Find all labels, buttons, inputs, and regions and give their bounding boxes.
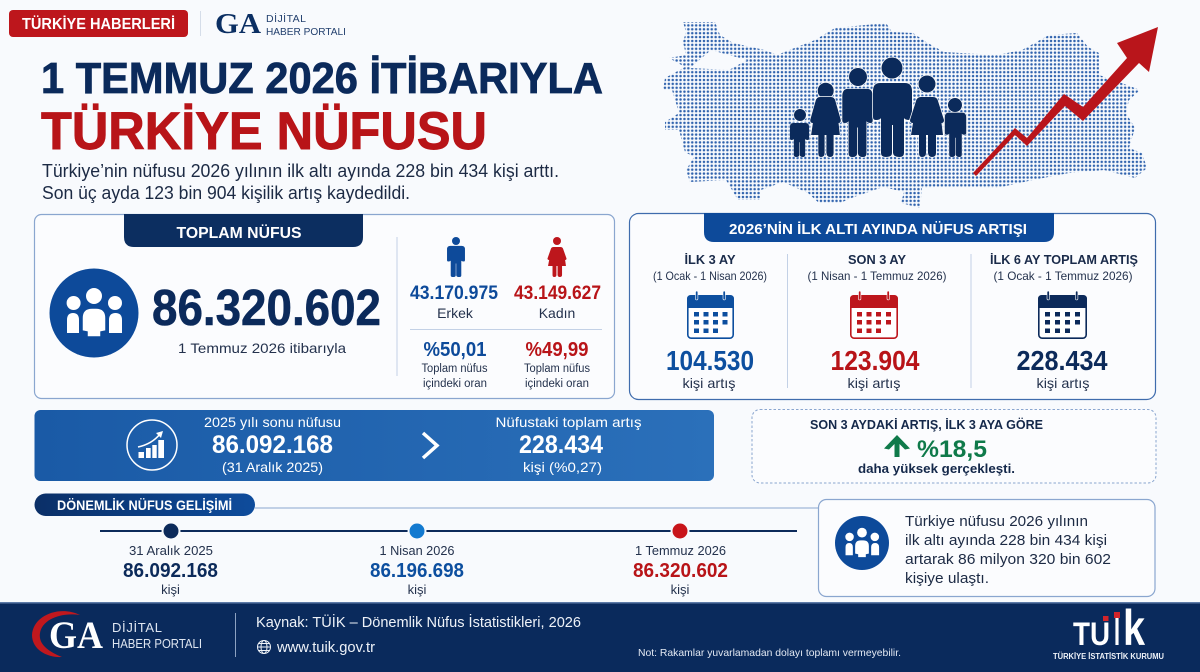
column: first 3 months: 104.530: [666, 345, 754, 376]
footer logo: TÜİK: k: [1123, 600, 1145, 656]
column: first 3 months: kişi artış: [682, 375, 736, 391]
heading: Toplam Nüfus: [124, 214, 363, 247]
heading: periodic population development: DÖNEMLİK NÜFUS GELİŞİMİ: [57, 497, 232, 513]
title: TÜRKİYE NÜFUSU: [41, 102, 487, 161]
year-end figure: 86.092.168: [212, 431, 333, 459]
icon: female figure: [547, 237, 567, 277]
summary text: ilk altı ayında 228 bin 434 kişi: [905, 532, 1107, 549]
subtitle text: Son üç ayda 123 bin 904 kişilik artış kaydedildi.: [42, 183, 410, 203]
male statistics: Toplam nüfus: [422, 363, 488, 375]
total increase figure: [496, 414, 642, 475]
heading: periodic population development: [34, 494, 818, 516]
milestone: 1 Nisan 2026: kişi: [408, 582, 426, 597]
milestone: 1 Nisan 2026: 86.196.698: [370, 560, 464, 582]
total increase figure: 228.434: [519, 431, 603, 459]
female statistics: %49,99: [526, 339, 588, 361]
footer logo: GA: GA: [49, 614, 103, 657]
summary text: artarak 86 milyon 320 bin 602: [905, 551, 1111, 568]
footer logo: GA: DİJİTAL: [112, 620, 162, 635]
year-end figure: 2025 yılı sonu nüfusu: [204, 414, 341, 430]
female statistics: 43.149.627: [514, 283, 601, 304]
website link with globe icon: www.tuik.gov.tr: [276, 639, 375, 656]
column: last 3 months: (1 Nisan - 1 Temmuz 2026): [808, 269, 946, 283]
milestone: 31 Aralık 2025: [123, 522, 218, 597]
column: six month total: [990, 252, 1138, 391]
column: first 3 months: [653, 252, 767, 391]
column: six month total: 228.434: [1016, 345, 1108, 376]
arrow: rising red trend: [973, 27, 1158, 176]
subtitle text: Türkiye’nin nüfusu 2026 yılının ilk altı ayında 228 bin 434 kişi arttı.: [42, 161, 559, 181]
footer logo: TÜİK: TÜ: [1073, 616, 1110, 652]
icon: blue calendar: [687, 291, 734, 338]
footnote: Not: Rakamlar yuvarlamadan dolayı toplamı vermeyebilir.: [638, 647, 901, 659]
milestone: 1 Temmuz 2026: 1 Temmuz 2026: [635, 543, 726, 558]
column: last 3 months: SON 3 AY: [848, 252, 906, 267]
male statistics: 43.170.975: [410, 283, 498, 304]
panel: year-end population band: [34, 410, 714, 481]
footer logo: GA: HABER PORTALI: [112, 636, 202, 651]
title: [41, 54, 603, 161]
footer logo: TÜİK: [1053, 600, 1164, 661]
milestone: 1 Nisan 2026: [370, 522, 464, 597]
icon: red calendar: [850, 291, 898, 338]
male statistics: Erkek: [437, 305, 474, 321]
callout: quarter comparison: %18,5: [917, 436, 987, 463]
total population figure: [152, 279, 381, 356]
callout: quarter comparison: SON 3 AYDAKİ ARTIŞ, İLK 3 AYA GÖRE: [810, 417, 1043, 432]
icon: people in blue circle: [50, 268, 138, 358]
column: last 3 months: 123.904: [830, 345, 920, 376]
column: first 3 months: İLK 3 AY: [684, 252, 736, 267]
icon: navy calendar: [1038, 291, 1087, 338]
male statistics: %50,01: [424, 339, 486, 361]
milestone: 1 Temmuz 2026: 86.320.602: [633, 560, 728, 582]
source text: Kaynak: TÜİK – Dönemlik Nüfus İstatistikleri, 2026: [256, 613, 581, 631]
header logo: GA Dijital Haber Portalı: HABER PORTALI: [266, 26, 346, 38]
total increase figure: Nüfustaki toplam artış: [496, 414, 642, 430]
milestone: 1 Nisan 2026: 1 Nisan 2026: [380, 543, 454, 558]
summary text: [905, 513, 1111, 587]
icon: growth chart: [127, 420, 177, 470]
female statistics: [514, 237, 601, 390]
header logo: GA Dijital Haber Portalı: GA: [215, 9, 262, 40]
heading: Toplam Nüfus: TOPLAM NÜFUS: [176, 223, 302, 242]
female statistics: içindeki oran: [525, 378, 589, 390]
total population figure: 1 Temmuz 2026 itibarıyla: [178, 340, 346, 356]
footer logo: GA: [32, 611, 202, 657]
icon: male figure: [447, 237, 465, 277]
column: six month total: kişi artış: [1036, 375, 1090, 391]
header badge: Türkiye Haberleri: [9, 10, 188, 37]
panel: total population: [34, 214, 614, 398]
footer logo: TÜİK: TÜRKİYE İSTATİSTİK KURUMU: [1053, 652, 1164, 661]
header logo: GA Dijital Haber Portalı: [200, 9, 346, 40]
subtitle text: [42, 161, 559, 203]
callout: quarter comparison: [752, 410, 1156, 483]
column: six month total: İLK 6 AY TOPLAM ARTIŞ: [990, 252, 1138, 267]
footer: [0, 600, 1200, 672]
column: last 3 months: kişi artış: [848, 375, 900, 391]
milestone: 31 Aralık 2025: kişi: [161, 582, 180, 597]
panel: summary note: [818, 500, 1155, 596]
total increase figure: kişi (%0,27): [523, 459, 602, 475]
timeline: [100, 522, 797, 597]
title: 1 TEMMUZ 2026 İTİBARIYLA: [41, 54, 603, 103]
column: six month total: (1 Ocak - 1 Temmuz 2026): [994, 269, 1132, 283]
summary text: kişiye ulaştı.: [905, 570, 989, 587]
arrow: chevron: [423, 433, 437, 458]
year-end figure: [204, 414, 341, 475]
total population figure: 86.320.602: [152, 279, 381, 336]
footer logo: TÜİK: İ: [1114, 603, 1120, 655]
header badge: Türkiye Haberleri: TÜRKİYE HABERLERİ: [22, 16, 175, 33]
icon: green up arrow: [884, 435, 910, 457]
callout: quarter comparison: daha yüksek gerçekleşti.: [858, 461, 1015, 476]
column: last 3 months: [808, 252, 946, 391]
panel: first six months increase: [630, 213, 1156, 400]
milestone: 1 Temmuz 2026: kişi: [671, 582, 689, 597]
summary text: Türkiye nüfusu 2026 yılının: [905, 513, 1088, 530]
female statistics: Kadın: [539, 305, 575, 321]
header logo: GA Dijital Haber Portalı: DİJİTAL: [266, 12, 306, 25]
year-end figure: (31 Aralık 2025): [222, 459, 323, 475]
icon: family silhouettes: [790, 58, 966, 157]
milestone: 31 Aralık 2025: 86.092.168: [123, 560, 218, 582]
dotted map of Türkiye: [663, 22, 1147, 208]
column: first 3 months: (1 Ocak - 1 Nisan 2026): [653, 269, 767, 283]
heading: first six months: [704, 213, 1054, 242]
milestone: 31 Aralık 2025: 31 Aralık 2025: [129, 543, 213, 558]
milestone: 1 Temmuz 2026: [633, 522, 728, 597]
male statistics: [410, 237, 498, 390]
male statistics: içindeki oran: [423, 378, 487, 390]
icon: people in circle: [835, 516, 889, 570]
heading: first six months: 2026’NİN İLK ALTI AYINDA NÜFUS ARTIŞI: [729, 221, 1027, 238]
female statistics: Toplam nüfus: [524, 363, 590, 375]
